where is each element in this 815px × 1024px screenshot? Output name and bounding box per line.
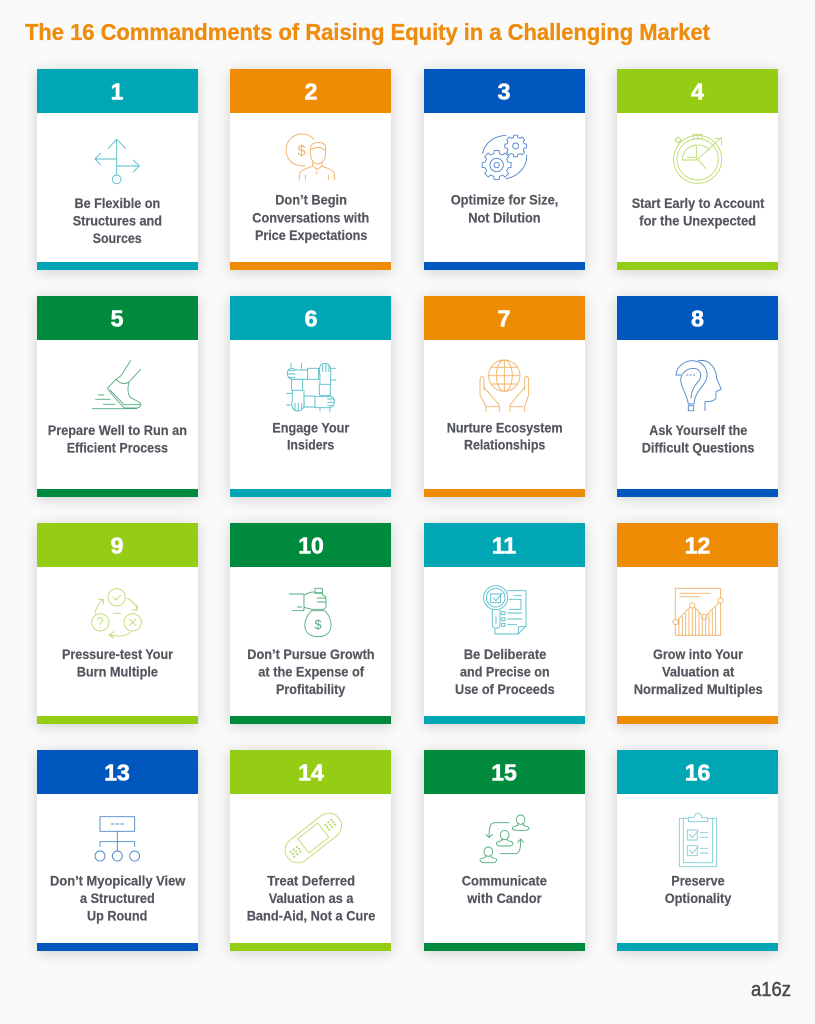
text: Difficult Questions bbox=[642, 440, 754, 455]
panel: commandment 4 bbox=[617, 69, 778, 270]
number 2: 2 bbox=[305, 78, 317, 104]
number 15: 15 bbox=[491, 760, 517, 786]
icon: hands holding globe bbox=[480, 360, 529, 412]
panel: commandment 6 bbox=[230, 296, 391, 497]
panel: commandment 16 bbox=[617, 750, 778, 951]
number 11: 11 bbox=[492, 532, 516, 558]
text bbox=[451, 193, 558, 225]
panel: commandment 9 bbox=[37, 523, 198, 724]
text: Treat Deferred bbox=[267, 874, 355, 889]
title: The 16 Commandments of Raising Equity in a Challenging Market bbox=[25, 19, 710, 45]
text bbox=[73, 196, 162, 246]
panel: commandment 12 bbox=[617, 523, 778, 724]
text: Ask Yourself the bbox=[649, 423, 747, 438]
text bbox=[272, 420, 350, 453]
text: at the Expense of bbox=[258, 664, 365, 679]
panel: commandment 5 bbox=[37, 296, 198, 497]
text: Start Early to Account bbox=[632, 196, 765, 211]
text: Profitability bbox=[276, 682, 346, 697]
logo: a16z: a16z bbox=[751, 979, 791, 1001]
number 7: 7 bbox=[498, 306, 510, 332]
text: Band-Aid, Not a Cure bbox=[247, 909, 375, 924]
text: Normalized Multiples bbox=[634, 682, 763, 697]
text: Price Expectations bbox=[255, 228, 367, 243]
text bbox=[62, 647, 174, 679]
text bbox=[462, 874, 547, 906]
icon: growth chart bbox=[673, 588, 723, 635]
icon: magnifier over document bbox=[484, 586, 526, 634]
text: Optimize for Size, bbox=[451, 193, 558, 208]
icon: gears bbox=[482, 135, 527, 179]
number 3: 3 bbox=[498, 78, 510, 104]
text: Up Round bbox=[87, 909, 147, 924]
text: Efficient Process bbox=[67, 440, 168, 455]
text bbox=[247, 647, 375, 697]
number 8: 8 bbox=[691, 306, 704, 332]
icon: org chart bbox=[95, 817, 140, 861]
text: Insiders bbox=[287, 438, 334, 453]
text bbox=[665, 874, 732, 906]
text: Optionality bbox=[665, 891, 732, 906]
icon: hand holding money bag: $ bbox=[314, 618, 321, 632]
text: Don’t Begin bbox=[275, 193, 347, 208]
icon: clipboard checklist bbox=[679, 813, 717, 867]
text: Communicate bbox=[462, 874, 547, 889]
number 12: 12 bbox=[685, 532, 710, 558]
text bbox=[247, 874, 375, 924]
panel: commandment 2 bbox=[230, 69, 391, 270]
icon: stopwatch bbox=[674, 134, 722, 183]
text: Engage Your bbox=[272, 420, 350, 435]
text bbox=[455, 647, 555, 697]
panel: commandment 8 bbox=[617, 296, 778, 497]
text: Be Deliberate bbox=[464, 647, 546, 662]
icon: running shoe bbox=[92, 361, 141, 409]
text bbox=[447, 420, 563, 453]
number 6: 6 bbox=[305, 306, 317, 332]
text: Don’t Pursue Growth bbox=[247, 647, 375, 662]
text: Valuation as a bbox=[269, 891, 354, 906]
text: Conversations with bbox=[252, 210, 369, 225]
text: Use of Proceeds bbox=[455, 682, 555, 697]
number 10: 10 bbox=[298, 532, 324, 558]
number 4: 4 bbox=[691, 78, 704, 104]
text bbox=[50, 874, 186, 924]
panel: commandment 13 bbox=[37, 750, 198, 951]
text: and Precise on bbox=[460, 664, 550, 679]
panel: commandment 11 bbox=[424, 523, 585, 724]
icon: head with question mark bbox=[676, 360, 721, 411]
number 9: 9 bbox=[111, 532, 123, 558]
panel: commandment 14 bbox=[230, 750, 391, 951]
text: Nurture Ecosystem bbox=[447, 420, 563, 435]
panel: commandment 3 bbox=[424, 69, 585, 270]
icon: branching arrows bbox=[95, 139, 139, 184]
text: a Structured bbox=[80, 891, 155, 906]
number 5: 5 bbox=[111, 306, 124, 332]
icon: cycle of check, cross and question bbox=[92, 589, 141, 638]
panel: commandment 10 bbox=[230, 523, 391, 724]
text: Don’t Myopically View bbox=[50, 874, 186, 889]
text bbox=[642, 423, 754, 455]
panel: commandment 1 bbox=[37, 69, 198, 270]
number 13: 13 bbox=[104, 760, 130, 786]
text: with Candor bbox=[466, 891, 542, 906]
text: Pressure-test Your bbox=[62, 647, 174, 662]
icon: interlocked hands bbox=[287, 363, 336, 412]
text bbox=[634, 647, 763, 697]
text: Preserve bbox=[671, 874, 725, 889]
text: Burn Multiple bbox=[77, 664, 158, 679]
icon: person and dollar bbox=[286, 134, 335, 180]
text bbox=[48, 423, 187, 455]
text: Prepare Well to Run an bbox=[48, 423, 187, 438]
icon: person and dollar: $ bbox=[298, 143, 306, 159]
panel: commandment 15 bbox=[424, 750, 585, 951]
icon: people exchanging arrows bbox=[480, 815, 529, 863]
text: Grow into Your bbox=[653, 647, 744, 662]
text: Valuation at bbox=[662, 664, 735, 679]
text bbox=[252, 193, 369, 243]
panel: commandment 7 bbox=[424, 296, 585, 497]
icon: hand holding money bag bbox=[289, 588, 331, 637]
number 1: 1 bbox=[111, 78, 124, 104]
number 14: 14 bbox=[298, 760, 324, 786]
text: for the Unexpected bbox=[639, 214, 756, 229]
number 16: 16 bbox=[685, 760, 710, 786]
text: Not Dilution bbox=[468, 210, 541, 225]
text: Structures and bbox=[73, 214, 162, 229]
icon: bandage bbox=[280, 808, 347, 868]
text: Be Flexible on bbox=[74, 196, 160, 211]
text: Sources bbox=[93, 231, 142, 246]
text bbox=[632, 196, 765, 229]
text: Relationships bbox=[464, 438, 545, 453]
